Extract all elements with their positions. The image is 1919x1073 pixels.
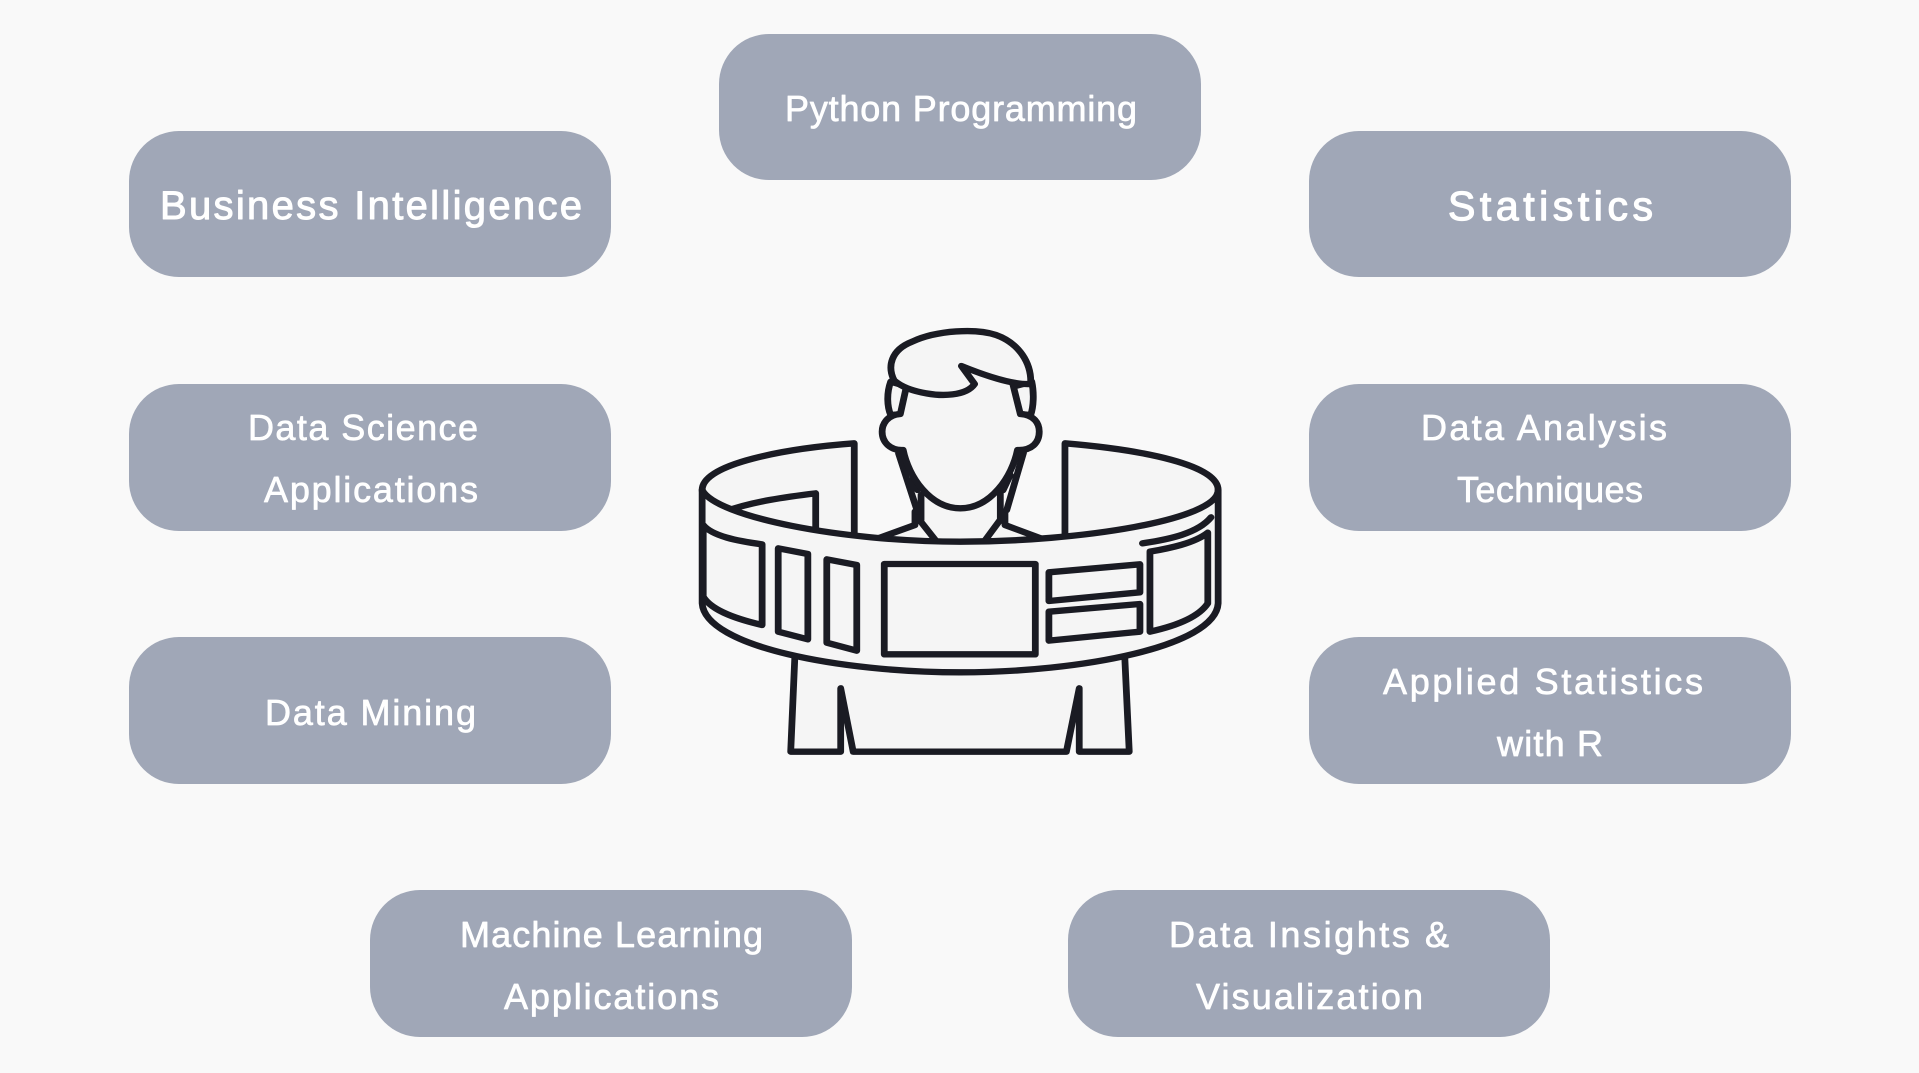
pill: Applied Statistics with R: with R: [1496, 723, 1603, 764]
pill: Applied Statistics with R: [1309, 637, 1791, 784]
pill: Python Programming: [719, 34, 1201, 180]
pill: Data Mining: Data Mining: [265, 692, 476, 733]
pill: Data Analysis Techniques: Techniques: [1457, 469, 1643, 510]
pill: Data Insights and Visualization: Data Insights &: [1169, 914, 1449, 955]
side hair: [888, 382, 1033, 415]
pill: Python Programming: Python Programming: [785, 88, 1137, 129]
pill: Data Science Applications: Data Science: [248, 407, 478, 448]
hair: [891, 331, 1031, 395]
back screen left: [702, 443, 854, 540]
pill: Data Insights and Visualization: [1068, 890, 1550, 1037]
pill: Statistics: Statistics: [1448, 183, 1653, 229]
pill: Machine Learning Applications: Machine Learning: [460, 914, 763, 955]
center panel: [884, 564, 1035, 654]
far right panel: [1150, 533, 1208, 632]
back screen right: [1065, 443, 1218, 540]
pill: Data Science Applications: [129, 384, 611, 531]
icon: data scientist surrounded by curved screen: [702, 331, 1218, 752]
pill: Data Analysis Techniques: Data Analysis: [1421, 407, 1667, 448]
pill: Data Insights and Visualization: Visualization: [1196, 976, 1423, 1017]
pill: Business Intelligence: [129, 131, 611, 277]
right upper panel: [1049, 564, 1140, 601]
pill: Data Analysis Techniques: [1309, 384, 1791, 531]
pill: Machine Learning Applications: Applications: [504, 976, 719, 1017]
pill: Business Intelligence: Business Intelligence: [160, 184, 582, 228]
pill: Statistics: [1309, 131, 1791, 277]
right lower panel: [1049, 604, 1140, 641]
shirt and collar: [880, 492, 1039, 540]
pill: Machine Learning Applications: [370, 890, 852, 1037]
pill: Data Science Applications: Applications: [264, 469, 478, 510]
left panel: [703, 525, 762, 625]
front screen band: [702, 490, 1218, 672]
pill: Applied Statistics with R: Applied Statistics: [1383, 661, 1703, 702]
narrow panel 2: [827, 559, 857, 651]
band highlight: [1142, 517, 1211, 543]
narrow panel 1: [778, 548, 808, 639]
head: [882, 350, 1039, 508]
pill: Data Mining: [129, 637, 611, 784]
torso: [791, 653, 1129, 752]
